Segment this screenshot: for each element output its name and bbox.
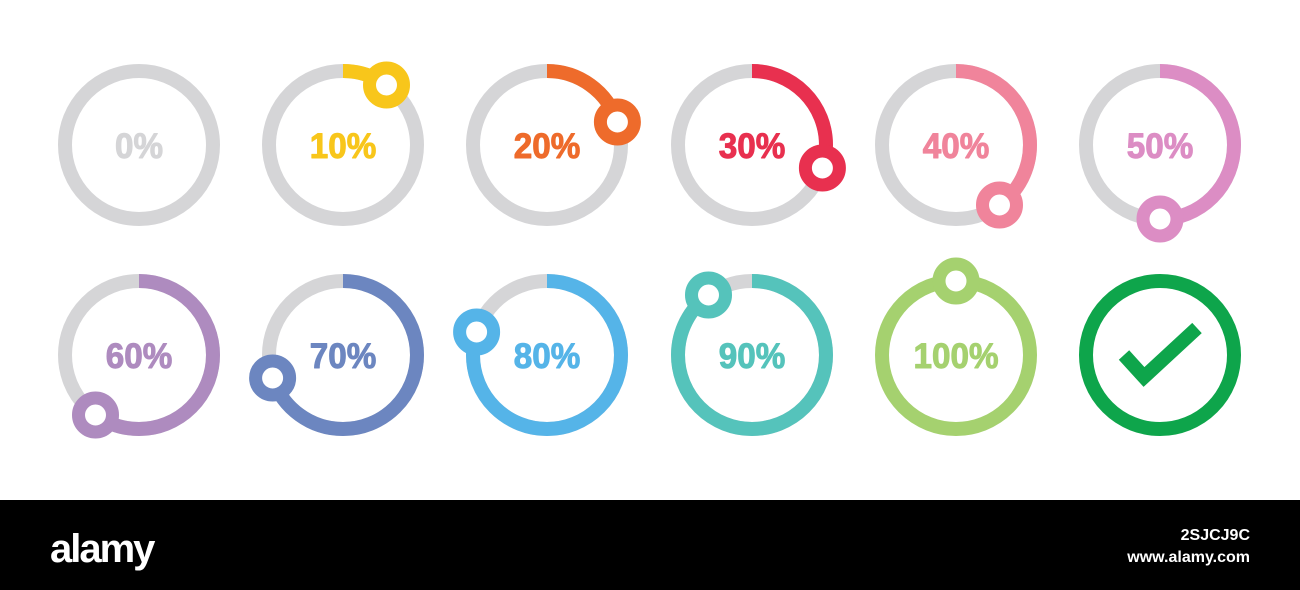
circle: 30%: 30% <box>719 127 785 166</box>
circle: 100% <box>882 264 1030 429</box>
footer image id: 2SJCJ9C <box>1181 527 1250 544</box>
circle: 0% <box>65 71 213 219</box>
circle: 10%: 10% <box>310 127 376 166</box>
circle: 20%: 20% <box>514 127 580 166</box>
circle: 70%: 70% <box>310 337 376 376</box>
circle: 100%: 100% <box>913 337 999 376</box>
circle: checkmark done <box>1086 281 1234 429</box>
footer logo: alamy <box>50 527 156 571</box>
circle: 20% <box>473 71 634 219</box>
circle: 0%: 0% <box>115 127 163 166</box>
circle: 70% <box>256 281 417 429</box>
circle: 90%: 90% <box>719 337 785 376</box>
circle: 60%: 60% <box>106 337 172 376</box>
footer url: www.alamy.com <box>1126 549 1250 566</box>
circle: 80%: 80% <box>514 337 580 376</box>
circle: 30% <box>678 71 839 219</box>
circle: 10% <box>269 68 417 219</box>
circle: 40% <box>882 71 1030 222</box>
circle: 50%: 50% <box>1127 127 1193 166</box>
circle: 60% <box>65 281 213 432</box>
circle: 50% <box>1086 71 1234 236</box>
footer band <box>0 500 1300 590</box>
circle: 80% <box>460 281 621 429</box>
circle: 40%: 40% <box>923 127 989 166</box>
circle: 90% <box>678 278 826 429</box>
